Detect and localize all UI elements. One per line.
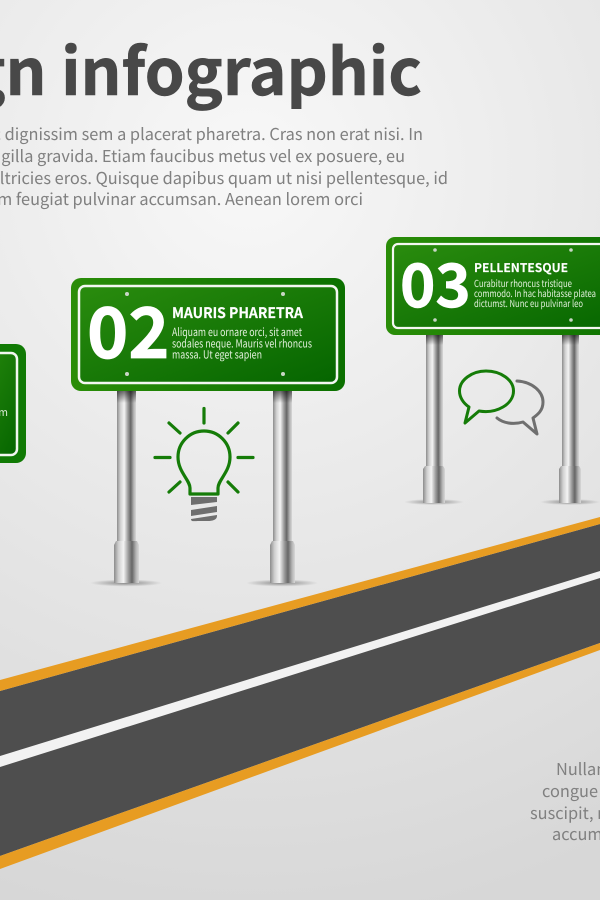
grey bubble xyxy=(497,381,543,434)
heading: MAURIS PHARETRA xyxy=(172,302,304,323)
panel xyxy=(71,278,345,391)
white centre line xyxy=(0,571,600,767)
road xyxy=(0,517,600,869)
bottom right paragraph xyxy=(530,756,600,845)
icon: speech bubbles xyxy=(460,371,543,434)
panel xyxy=(386,237,600,335)
green bubble xyxy=(460,371,514,423)
road sign 02 xyxy=(71,278,345,586)
body: sodales neque. Mauris vel rhoncus xyxy=(172,336,312,352)
intro paragraph: ultricies eros. Quisque dapibus quam ut nisi pellentesque, id xyxy=(0,165,448,189)
base xyxy=(191,497,217,521)
orange top edge xyxy=(0,517,600,691)
body: Aliquam eu ornare orci, sit amet xyxy=(172,324,303,340)
glass xyxy=(178,431,230,494)
road sign 01 xyxy=(0,344,26,463)
body xyxy=(172,324,312,362)
intro paragraph xyxy=(0,121,448,210)
road sign 03 xyxy=(386,237,600,505)
screws xyxy=(125,292,285,376)
screws xyxy=(433,248,573,322)
body: massa. Ut eget sapien xyxy=(172,346,262,362)
number 02: 02 xyxy=(87,278,170,379)
posts xyxy=(404,335,600,505)
posts xyxy=(90,391,318,586)
asphalt xyxy=(0,524,600,856)
icon: light bulb xyxy=(155,408,253,521)
body: Curabitur rhoncus tristique xyxy=(474,276,572,290)
number 03: 03 xyxy=(400,238,471,325)
rays xyxy=(155,408,253,492)
body xyxy=(474,276,596,310)
heading: PELLENTESQUE xyxy=(474,259,568,276)
orange bottom edge xyxy=(0,643,600,869)
